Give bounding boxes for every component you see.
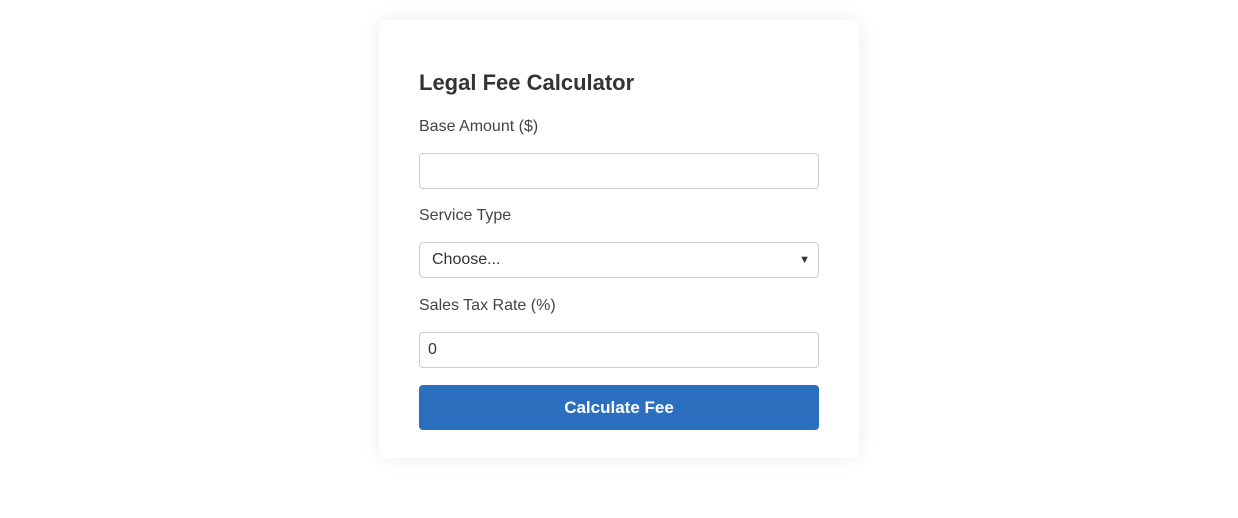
title: Legal Fee Calculator — [419, 70, 634, 95]
label: base amount: Base Amount ($) — [419, 118, 538, 135]
select: service type — [419, 242, 819, 278]
label: service type: Service Type — [419, 207, 511, 224]
input: sales tax — [419, 332, 819, 368]
select: service type: Choose... — [432, 251, 500, 268]
select: service type: ▼ — [799, 254, 810, 266]
button: calculate: Calculate Fee — [564, 398, 674, 417]
input: sales tax: 0 — [428, 341, 437, 358]
label: sales tax: Sales Tax Rate (%) — [419, 297, 556, 314]
button: calculate — [419, 385, 819, 430]
input: base amount — [419, 153, 819, 189]
panel: calculator card — [379, 20, 859, 458]
